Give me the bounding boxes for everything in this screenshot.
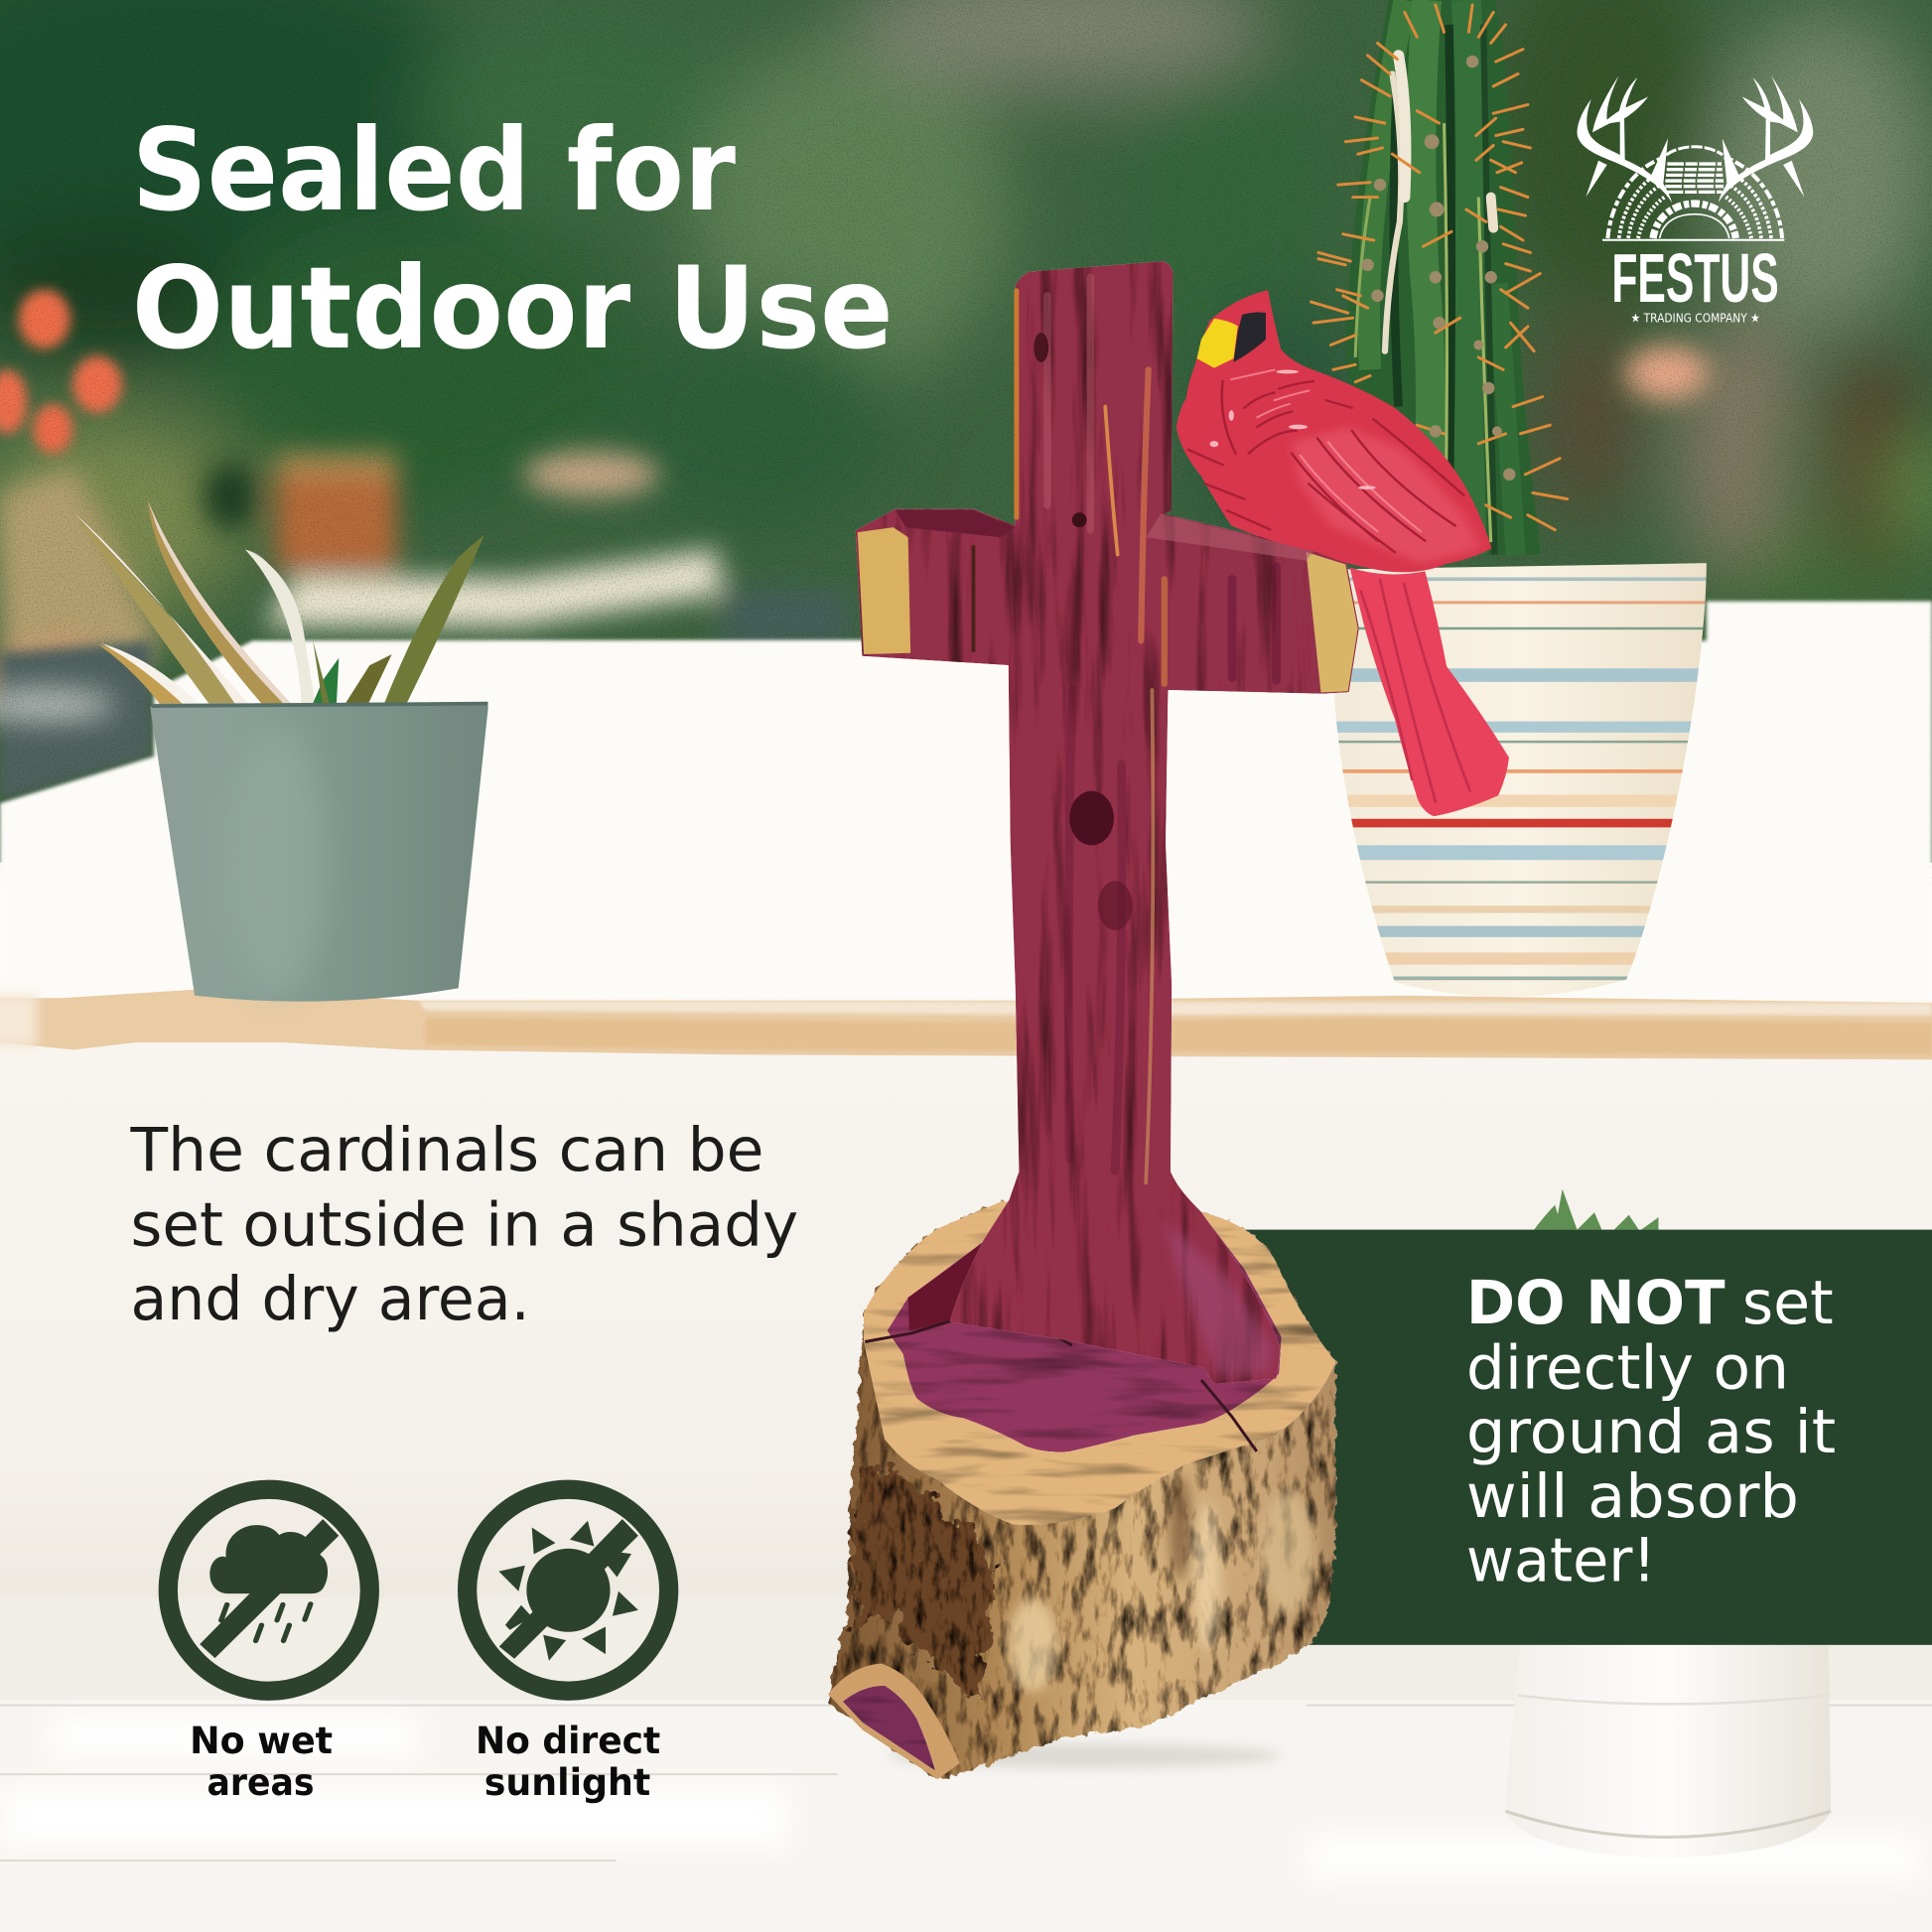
panel: do not set on ground (1232, 1230, 1932, 1645)
panel warning text: water! (1466, 1526, 1656, 1595)
ledge and wall (0, 990, 1932, 1614)
white wall behind pots (0, 602, 1932, 1023)
label: no direct sunlight: No direct (476, 1719, 660, 1762)
cardinal wing highlight (1292, 427, 1481, 564)
label: no direct sunlight (476, 1719, 660, 1804)
branch cut (828, 1663, 960, 1779)
cardinal mask (1233, 313, 1266, 362)
stump dark bark patch (853, 1466, 1001, 1701)
stump bark (828, 1201, 1335, 1779)
panel warning text: directly on (1466, 1334, 1789, 1404)
label: no wet areas: areas (207, 1760, 314, 1804)
grey-green pot body (150, 702, 488, 1002)
cardinal body (1176, 290, 1492, 572)
label: no wet areas: No wet (190, 1719, 333, 1762)
cardinal beak (1197, 319, 1238, 368)
body text: outdoor placement (130, 1116, 798, 1334)
cedar cross (857, 262, 1358, 1382)
logo wood slice (1602, 147, 1784, 240)
stump crack (865, 1320, 1257, 1451)
title: Sealed for (132, 104, 736, 236)
logo wordmark (1611, 239, 1779, 326)
panel warning text (1466, 1269, 1836, 1595)
cactus ribs (1355, 0, 1516, 554)
panel warning text: ground as it (1466, 1398, 1836, 1467)
logo wordmark: ★ TRADING COMPANY ★ (1631, 311, 1760, 326)
panel warning text: will absorb (1466, 1462, 1799, 1532)
stump dark inner wedge (908, 1226, 1004, 1330)
label: no direct sunlight: sunlight (484, 1760, 650, 1804)
body text: outdoor placement: set outside in a shady (131, 1191, 798, 1261)
stump cut face (864, 1201, 1335, 1525)
body text: outdoor placement: The cardinals can be (130, 1116, 763, 1185)
white plank floor (0, 1596, 1932, 1932)
cross shape (857, 262, 1358, 1382)
cardinal tail (1350, 568, 1509, 816)
cactus spines (1311, 5, 1568, 530)
title (132, 104, 894, 374)
icon: no direct sunlight (468, 1489, 669, 1691)
logo antlers (1578, 75, 1813, 203)
carved cardinal (1176, 290, 1509, 816)
stump heartwood (888, 1200, 1282, 1452)
logo: Festus Trading Company (1578, 75, 1813, 326)
logo wordmark: FESTUS (1611, 239, 1779, 317)
cardinal feathers (1188, 381, 1463, 552)
panel warning text: DO NOT (1466, 1269, 1725, 1338)
blurred garden background (0, 0, 1932, 863)
body text: outdoor placement: and dry area. (131, 1265, 530, 1334)
icon: no wet areas (168, 1489, 369, 1691)
white bucket with plant (1504, 1189, 1831, 1859)
grey-green pot with aloe (73, 500, 488, 1002)
striped ceramic pot (1330, 563, 1713, 997)
cactus (1311, 0, 1568, 554)
label: no wet areas (190, 1719, 333, 1804)
stump base (828, 1200, 1335, 1779)
stump light bark patches (1008, 1476, 1314, 1692)
cross end grain and highlights (858, 277, 1358, 1378)
panel warning text: set (1742, 1269, 1834, 1338)
title: Outdoor Use (132, 242, 894, 374)
aloe leaves (73, 500, 484, 706)
